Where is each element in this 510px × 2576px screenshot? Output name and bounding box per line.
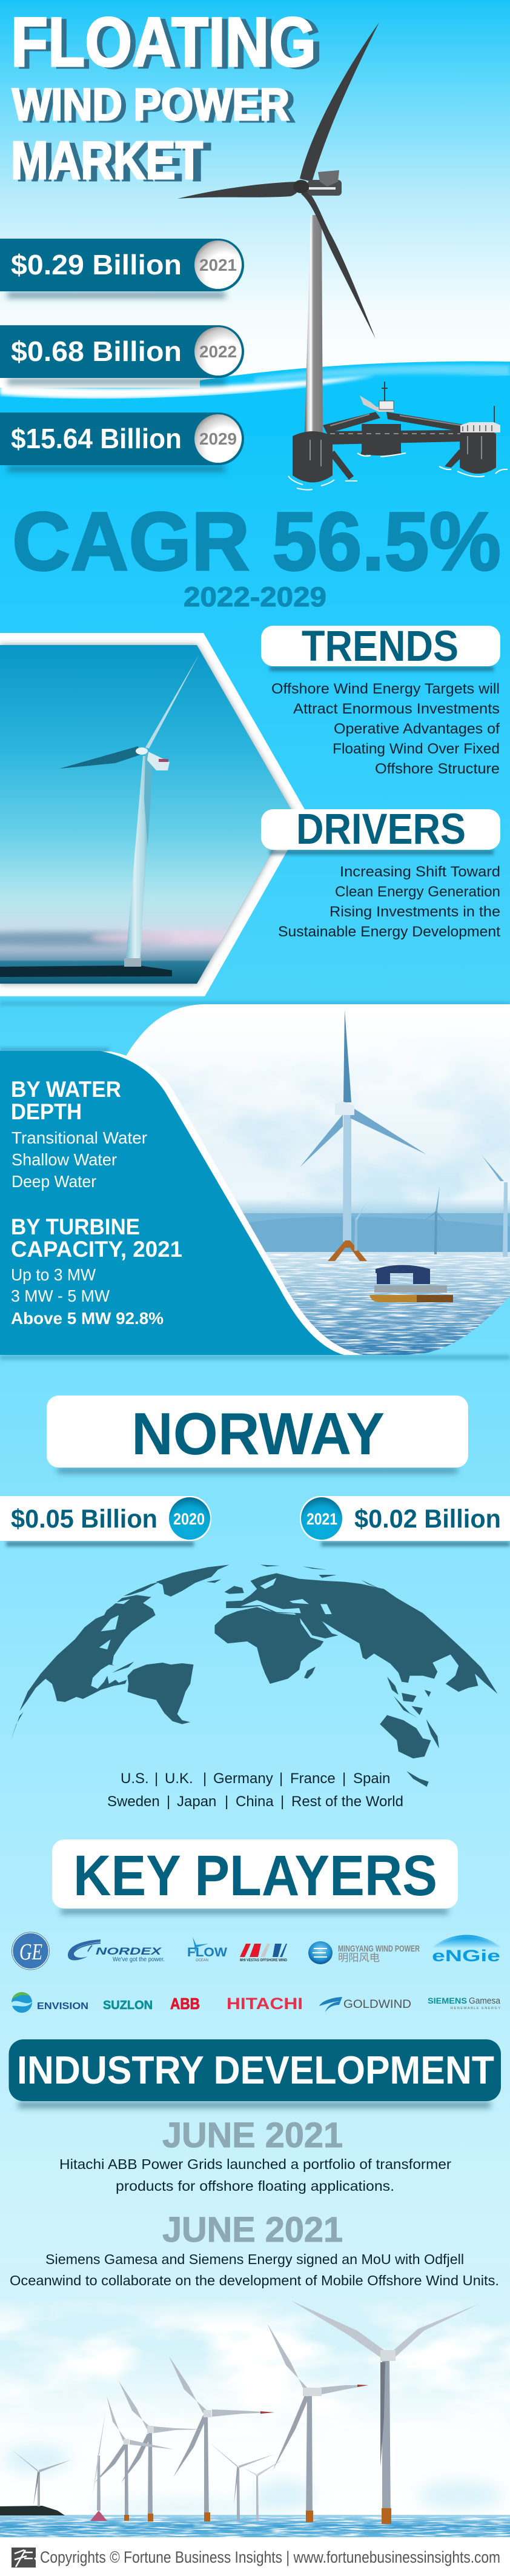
turbine 2	[267, 2323, 368, 2522]
panel: segmentation	[0, 1048, 510, 1360]
value pill: 2029: 2029	[199, 429, 237, 448]
panel: segmentation: BY WATER	[11, 1077, 121, 1102]
turbine 5	[94, 2396, 174, 2521]
heading: drivers: DRIVERS	[296, 806, 466, 853]
logo: MHI Vestas: MHI VESTAS OFFSHORE WIND	[240, 1959, 288, 1962]
text: region list: |	[280, 1793, 284, 1810]
logo: Mingyang: 明阳风电	[338, 1952, 380, 1964]
panel: offshore photo	[0, 1002, 510, 1357]
development: June 2021 Siemens Gamesa	[10, 2210, 499, 2288]
panel: segmentation: Deep Water	[12, 1172, 96, 1191]
value pill: Norway 2021: 2021	[306, 1510, 337, 1528]
logo: Suzlon: SUZLON	[103, 1999, 153, 2012]
panel: segmentation: Shallow Water	[12, 1150, 117, 1169]
turbine 9	[12, 2450, 71, 2506]
value pill: 2022	[0, 325, 244, 385]
title: MARKET	[11, 130, 203, 190]
panel: segmentation: 3 MW - 5 MW	[11, 1286, 110, 1305]
turbine 6	[90, 2412, 107, 2521]
logo: Mingyang	[308, 1941, 420, 1964]
panel: segmentation: BY TURBINE	[11, 1214, 140, 1239]
panel: segmentation: Up to 3 MW	[11, 1265, 96, 1284]
text: region list: |	[342, 1770, 346, 1787]
text: region list: U.S.	[121, 1770, 149, 1787]
logo: Siemens Gamesa: SIEMENS	[428, 1996, 467, 2005]
heading: key players: KEY PLAYERS	[73, 1844, 437, 1908]
text: region list: |	[279, 1770, 283, 1787]
text: drivers list	[278, 864, 500, 940]
text: region list: Rest of the World	[291, 1793, 403, 1810]
logo: Engie	[432, 1935, 500, 1965]
text: region list: Sweden	[107, 1793, 160, 1810]
logo: Goldwind: GOLDWIND	[343, 1998, 411, 2011]
icon: pontoon boat	[369, 1265, 453, 1302]
text: region list: Germany	[213, 1770, 273, 1787]
logo: GE: GE	[19, 1939, 42, 1965]
heading: industry development	[8, 2039, 501, 2108]
title	[11, 4, 322, 192]
text: trends list: Floating Wind Over Fixed	[333, 741, 500, 757]
title: FLOATING	[11, 4, 316, 81]
logo: Envision	[12, 1992, 88, 2013]
text: region list: U.K.	[165, 1770, 193, 1787]
turbine 7	[210, 2443, 274, 2521]
turbine 4	[119, 2381, 205, 2521]
turbine 8	[242, 2459, 283, 2521]
floating wind turbine illustration	[177, 22, 508, 490]
value pill: Norway 2020	[0, 1496, 211, 1546]
text: region list: |	[203, 1770, 207, 1787]
development: June 2021 Siemens Gamesa: Oceanwind to collaborate on the development of Mobile Offshore Wind Units.	[10, 2273, 499, 2288]
logo: Engie: eNGie	[432, 1947, 500, 1965]
logo: Flow Ocean	[187, 1937, 227, 1962]
logo: Flow Ocean: FLOW	[187, 1945, 227, 1959]
value pill: 2021: $0.29 Billion	[11, 249, 182, 280]
logo: Nordex: We've got the power.	[113, 1956, 165, 1963]
logo: Nordex	[68, 1939, 165, 1963]
text: trends list: Offshore Structure	[375, 761, 500, 777]
logo: Hitachi: HITACHI	[227, 1995, 303, 2013]
text: region list: Japan	[177, 1793, 216, 1810]
development: June 2021 Siemens Gamesa: Siemens Gamesa and Siemens Energy signed an MoU with Odfjell	[45, 2251, 464, 2267]
text: trends list: Offshore Wind Energy Targets will	[271, 681, 500, 697]
development: June 2021 Hitachi ABB: JUNE 2021	[162, 2116, 343, 2155]
heading: Norway: NORWAY	[131, 1400, 385, 1467]
panel: segmentation: DEPTH	[11, 1099, 82, 1124]
value pill: Norway 2021: $0.02 Billion	[354, 1505, 501, 1534]
logo: Nordex: NORDEX	[96, 1945, 162, 1957]
development: June 2021 Siemens Gamesa: JUNE 2021	[162, 2210, 343, 2250]
logo: Siemens Gamesa	[428, 1996, 501, 2010]
text: drivers list: Rising Investments in the	[330, 904, 500, 920]
title: FLOATING	[16, 5, 322, 83]
CAGR figure: 2022-2029	[184, 581, 326, 612]
title: WIND POWER	[12, 79, 290, 130]
text: region list	[107, 1770, 403, 1810]
value pill: Norway 2021	[300, 1496, 510, 1546]
text: region list: |	[154, 1770, 158, 1787]
panel: segmentation: CAPACITY, 2021	[11, 1237, 182, 1262]
logo: Envision: ENVISION	[37, 2001, 88, 2011]
value pill: 2022: 2022	[199, 342, 237, 361]
turbine 1	[291, 2300, 479, 2524]
title: WIND POWER	[16, 81, 295, 131]
development: June 2021 Hitachi ABB: Hitachi ABB Power Grids launched a portfolio of transformer	[59, 2156, 451, 2172]
text: region list: France	[290, 1770, 336, 1787]
text: drivers list: Sustainable Energy Development	[278, 924, 500, 940]
world map	[11, 1564, 498, 1787]
value pill: Norway 2020: $0.05 Billion	[11, 1505, 157, 1534]
footer	[0, 2537, 510, 2576]
value pill: 2029: $15.64 Billion	[11, 423, 182, 454]
panel: segmentation: Transitional Water	[12, 1128, 147, 1147]
text: trends list: Attract Enormous Investments	[293, 701, 500, 717]
text: region list: China	[236, 1793, 274, 1810]
development: June 2021 Hitachi ABB: products for offshore floating applications.	[116, 2178, 394, 2194]
logo: MHI Vestas	[240, 1944, 288, 1962]
text: drivers list: Clean Energy Generation	[335, 884, 500, 900]
logo: Goldwind	[319, 1997, 411, 2012]
logo: Siemens Gamesa: RENEWABLE ENERGY	[451, 2007, 500, 2010]
text: region list: Spain	[353, 1770, 390, 1787]
value pill: 2022: $0.68 Billion	[11, 336, 182, 367]
title: MARKET	[16, 132, 211, 192]
logo: Flow Ocean: OCEAN	[196, 1959, 208, 1962]
value pill: 2029	[0, 412, 244, 472]
value pill: 2021: 2021	[199, 256, 237, 274]
panel: segmentation: Above 5 MW 92.8%	[11, 1309, 164, 1328]
CAGR figure: CAGR 56.5%	[12, 495, 501, 588]
value pill: Norway 2020: 2020	[173, 1510, 205, 1528]
icon: Fortune Business Insights logo	[12, 2548, 36, 2568]
text: region list: |	[167, 1793, 170, 1810]
logo: GE	[12, 1932, 50, 1970]
logo: ABB: ABB	[170, 1995, 200, 2013]
heading: Norway	[47, 1396, 468, 1473]
panel: wind farm photo	[0, 2296, 510, 2537]
value pill: 2021	[0, 239, 244, 298]
logo: Siemens Gamesa: Gamesa	[469, 1996, 501, 2006]
text: drivers list: Increasing Shift Toward	[340, 864, 500, 880]
text: trends list	[271, 681, 500, 777]
text: region list: |	[225, 1793, 228, 1810]
text: trends list: Operative Advantages of	[334, 721, 500, 737]
heading: trends: TRENDS	[302, 623, 459, 670]
logo: Mingyang: MINGYANG WIND POWER	[338, 1944, 420, 1954]
turbine 3	[169, 2356, 274, 2521]
panel: turbine photo hexagon	[0, 633, 308, 996]
development: June 2021 Hitachi ABB	[59, 2116, 451, 2194]
